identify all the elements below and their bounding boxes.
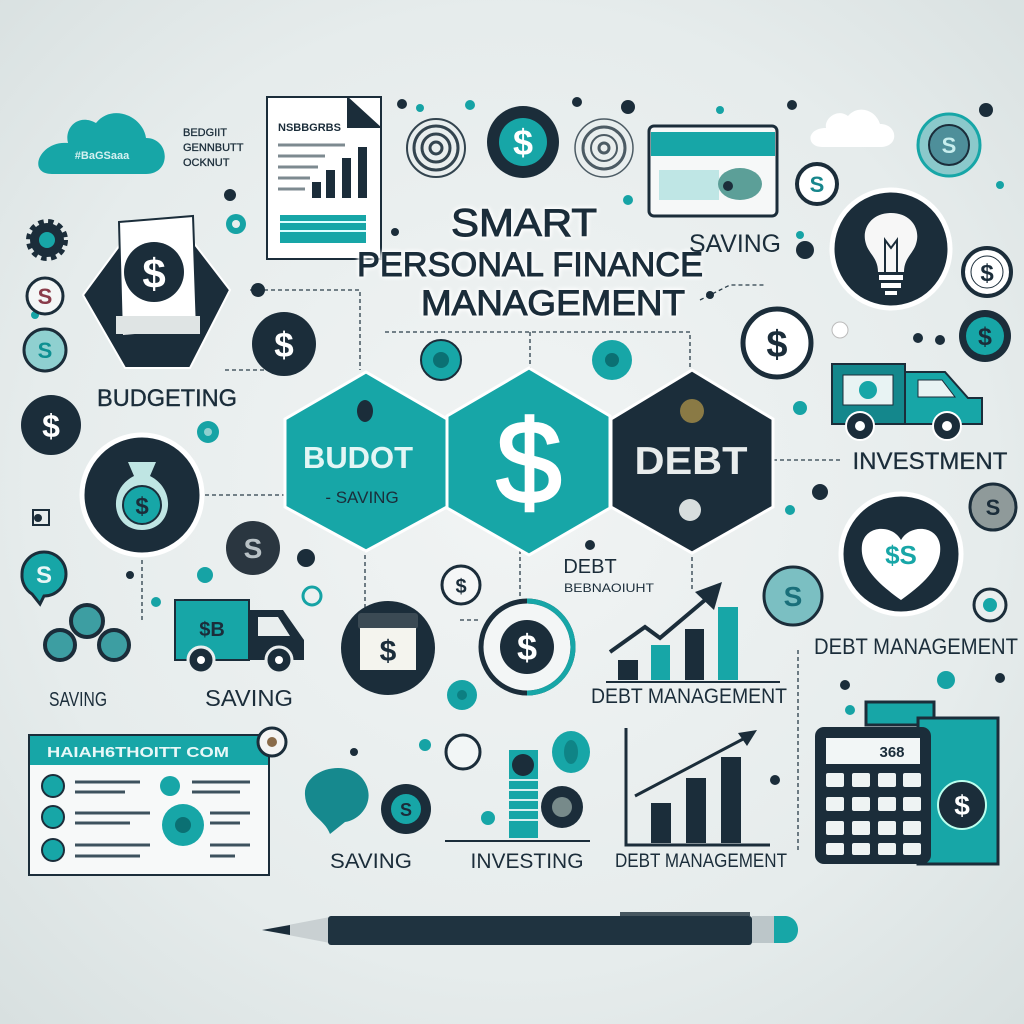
label: debt management middle: DEBT MANAGEMENT [591,685,787,708]
label: debt management bottom: DEBT MANAGEMENT [615,851,787,872]
icon: coin dark [381,784,431,834]
bar chart: axes with arrow [626,728,770,845]
icon: teal cloud: #BaGSaaa [75,150,130,162]
label: investing: INVESTING [470,850,584,873]
icon: budget hexagon note coin [83,216,230,368]
icon: speech coin left [22,552,66,604]
icon: dollar coin dark [252,312,316,376]
text block: top-left caption: BEDGIIT [183,127,227,139]
icon: teal ring top right [918,114,980,176]
icon: S coin right [963,248,1011,296]
text block: top-left caption: OCKNUT [183,157,230,169]
icon: dollar coin top [487,106,559,178]
icon: coin left S: S [38,284,52,309]
icon: dark truck [175,600,304,673]
title: SMART [451,202,597,245]
text block: top-left caption: GENNBUTT [183,142,244,154]
icon: S coin [797,164,837,204]
icon: document with chart [267,96,382,259]
icon: calculator and cash: $ [954,790,970,821]
icon: light bulb [832,190,950,308]
icon: heart circle: $S [885,540,917,570]
icon: white cloud [810,110,894,147]
label: budgeting: BUDGETING [97,385,237,412]
icon: teal ring coin [764,567,822,625]
icon: money bag circle [82,435,202,555]
icon: gray coin right: S [986,495,1000,520]
label: saving middle: SAVING [205,685,293,711]
icon: teal coin right: $ [978,323,992,351]
icon: budget hexagon note coin: $ [142,250,166,297]
connector lines [142,285,840,850]
icon: dollar coin left: $ [42,408,60,444]
hexagon: budget saving [285,372,447,551]
icon: calculator and cash [815,702,998,864]
hexagon: budget saving: - SAVING [325,488,399,507]
hexagon: dollar [447,368,610,555]
icon: coin left S [27,278,63,314]
icon: heart circle [841,494,961,614]
icon: three coins [45,605,129,660]
icon: gray coin right [970,484,1016,530]
icon: calculator and cash: 368 [879,744,905,761]
icon: dollar coin small: $ [455,576,467,598]
icon: big ringed dollar: $ [517,627,537,668]
icon: teal cloud [38,113,165,174]
icon: dollar coin left [21,395,81,455]
icon: delivery truck teal [832,364,982,440]
title [357,202,703,323]
icon: money jar coin [341,601,435,695]
icon: dollar coin top: $ [513,122,533,163]
icon: dollar coin dark: $ [274,326,294,365]
title: PERSONAL FINANCE [357,246,703,284]
icon: small coin right [974,589,1006,621]
panel: website card [29,728,286,875]
small scattered dots [31,97,1005,785]
icon: dollar coin mid right: $ [766,324,788,366]
label: investment: INVESTMENT [852,448,1008,475]
icon: teal coin left [24,329,66,371]
icon: speech coin left: S [36,562,52,589]
icon: teal globe [305,768,369,834]
text block: debt caption: BEBNAOIUHT [564,581,655,595]
icon: S coin: S [810,172,824,197]
icon: gear [30,223,64,257]
icon: teal coin right [959,310,1011,362]
panel: website card: HAIAH6THOITT COM [47,744,229,761]
label: saving bottom: SAVING [330,850,412,873]
icon: dark S coin: S [244,533,262,564]
icon: coin stack [445,731,590,841]
title: MANAGEMENT [421,284,685,323]
icon: big ringed dollar [481,601,573,693]
icon: dark S coin [226,521,280,575]
icon: spiral left [407,119,465,177]
icon: teal coins center row [421,340,632,380]
text block: debt caption: DEBT [563,556,617,578]
hexagon: debt [611,370,773,553]
icon: coin dark: S [400,800,412,820]
icon: money bag circle: $ [135,493,149,520]
icon: document with chart: NSBBGRBS [278,122,341,134]
text block: debt caption [563,556,655,595]
label: saving top: SAVING [689,230,781,258]
hexagon: budget saving: BUDOT [303,440,413,475]
icon: small box [33,510,49,525]
icon: pen [262,912,798,945]
icon: dollar coin small [442,566,480,604]
icon: teal coin left: S [38,338,52,363]
hexagon: debt: DEBT [634,440,748,483]
bar chart: rising with arrow [606,582,780,682]
hexagon: dollar: $ [496,397,562,529]
icon: spiral right [575,119,633,177]
icon: teal ring coin: S [784,581,802,612]
icon: credit card [649,126,777,216]
icon: dark truck: $B [199,619,225,641]
icon: S coin right: $ [980,260,994,287]
icon: money jar coin: $ [380,635,397,668]
icon: teal ring top right: S [942,133,956,158]
label: saving left: SAVING [49,689,107,711]
icon: dollar coin mid right [743,309,811,377]
